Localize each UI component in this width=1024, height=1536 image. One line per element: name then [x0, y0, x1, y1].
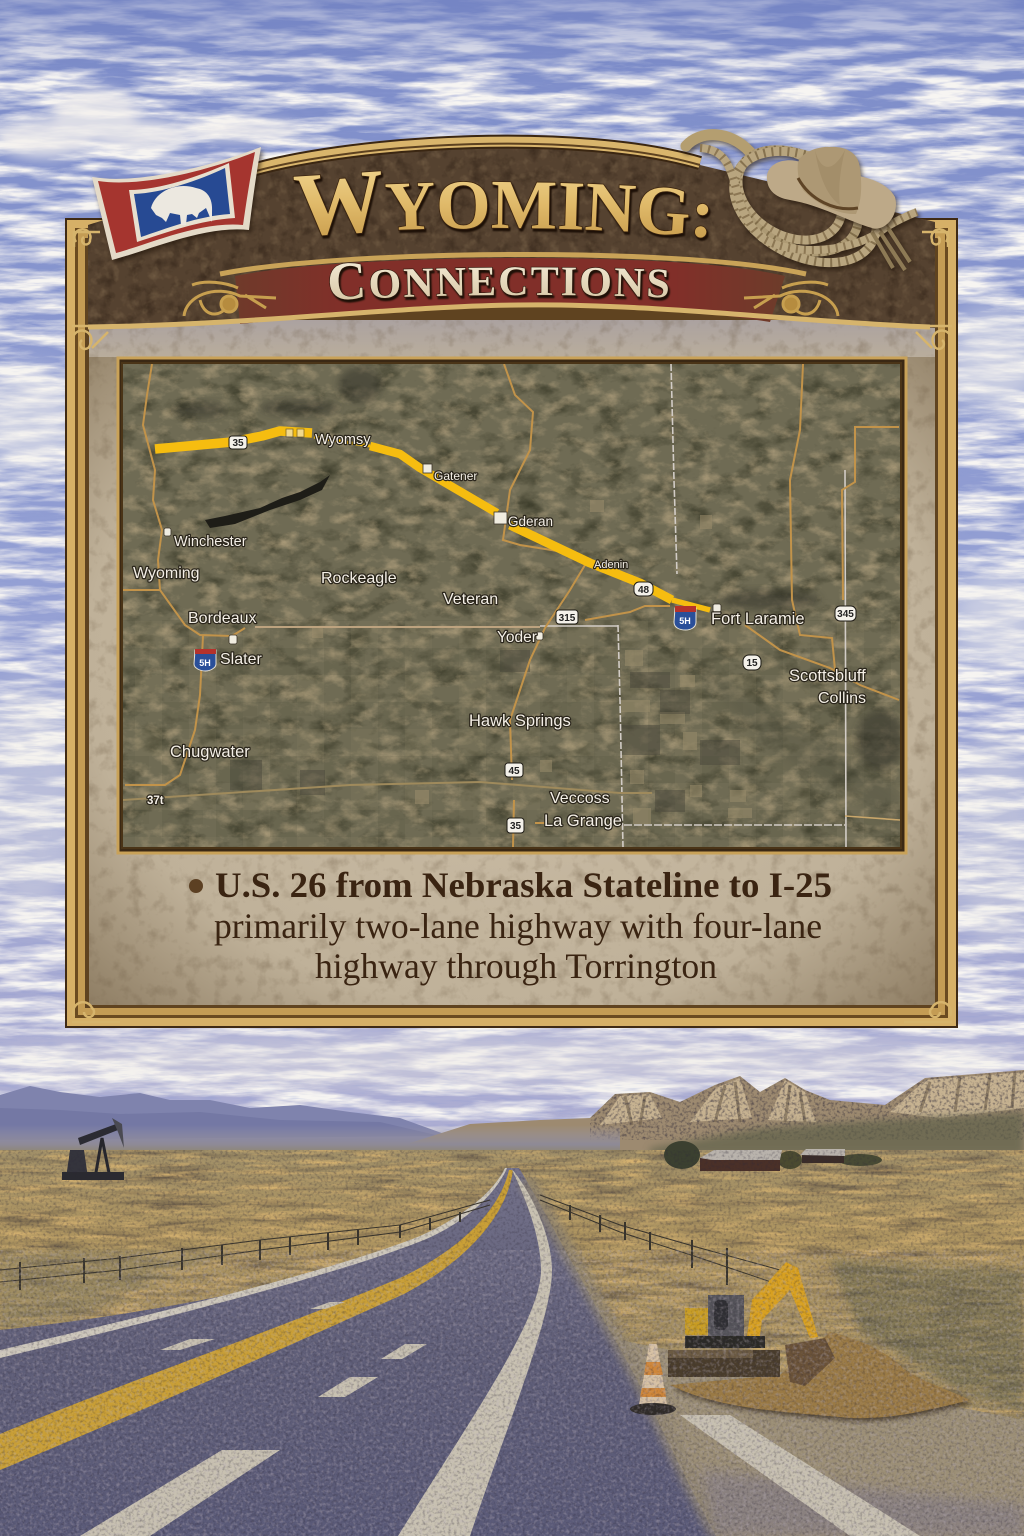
place labels: Fort Laramie: [711, 610, 805, 628]
place labels: Winchester: [174, 534, 247, 550]
place labels: Gatener: [434, 469, 477, 483]
place labels: Hawk Springs: [469, 712, 571, 730]
distant blue mountains: [0, 1086, 450, 1150]
right fence: [540, 1195, 780, 1285]
subtitle: CONNECTIONS: [329, 262, 671, 304]
local roads: [123, 364, 899, 847]
road shoulder: [515, 1170, 1024, 1536]
route shields: 35: [232, 438, 244, 449]
interstate shields: [194, 606, 696, 671]
route shields: [229, 436, 856, 833]
panel frame: [65, 218, 958, 1028]
east-west pale road: [255, 626, 540, 628]
description text: [189, 865, 832, 986]
place labels: Collins: [818, 690, 866, 707]
route shields: 15: [746, 658, 758, 669]
satellite map: [123, 364, 904, 847]
place labels: Wyoming: [133, 565, 200, 582]
parchment body: [89, 320, 935, 1005]
top arch moulding: [252, 142, 700, 170]
lariat rope: [686, 129, 917, 285]
place labels: Veccoss: [550, 790, 610, 807]
place labels: Yoder: [497, 629, 537, 646]
red ribbon: [235, 258, 785, 324]
cowboy hat: [767, 147, 896, 229]
highway heading: U.S. 26 from Nebraska Stateline to I-25: [215, 865, 832, 905]
description line two: highway through Torrington: [315, 946, 717, 986]
interstate shields: 5H: [679, 616, 691, 626]
route shields: 48: [638, 585, 649, 596]
traffic cone: [630, 1344, 676, 1415]
dark ridge: [205, 475, 330, 528]
place labels: Bordeaux: [188, 610, 256, 627]
place labels: Gderan: [508, 514, 553, 529]
route shields: 345: [837, 609, 854, 620]
US 26 highlighted route: [155, 431, 710, 610]
place labels: [133, 432, 866, 830]
prairie grass: [0, 1150, 1024, 1430]
place labels: Rockeagle: [321, 570, 397, 587]
map frame: [117, 357, 907, 854]
Wyoming flag: [92, 147, 261, 260]
asphalt road: [0, 1168, 1024, 1536]
excavator: [668, 1262, 835, 1386]
ribbon top rule: [220, 254, 806, 274]
ranch buildings: [664, 1141, 882, 1171]
place labels: Scottsbluff: [789, 667, 866, 685]
landscape scene: [0, 1070, 1024, 1536]
title: WYOMING:: [292, 170, 711, 242]
ribbon bottom rule: [88, 305, 930, 327]
description line one: primarily two-lane highway with four-lane: [214, 906, 822, 946]
sky background: [0, 0, 1024, 1160]
road grain: [0, 1150, 1024, 1536]
place labels: Wyomsy: [315, 432, 371, 448]
place labels: Veteran: [443, 591, 498, 608]
place labels: La Grange: [544, 812, 622, 830]
interstate shields: 5H: [199, 658, 211, 668]
horizon haze: [0, 1125, 620, 1153]
terrain texture: [123, 364, 900, 847]
place labels: Adenin: [594, 559, 628, 571]
route shields: 315: [559, 613, 576, 624]
town markers: [164, 429, 721, 644]
route shields: 35: [510, 821, 521, 832]
route shields: 45: [508, 766, 520, 777]
dirt pile: [670, 1332, 970, 1418]
flag bison: [151, 186, 212, 225]
farm field patches: [312, 500, 752, 824]
oil pump jack: [62, 1118, 124, 1180]
right white edge line: [398, 1168, 552, 1536]
gold eye ornaments: [184, 282, 838, 316]
edge lines and centre stripe: [0, 1168, 513, 1470]
corner ornaments: [72, 229, 952, 1022]
left fence: [0, 1200, 490, 1290]
dark hills: [174, 367, 904, 770]
bullet: [189, 879, 203, 893]
lane dashes: [80, 1302, 920, 1536]
right rocky buttes: [410, 1070, 1024, 1155]
state and county lines: [540, 364, 900, 847]
header plaque: [88, 130, 938, 330]
place labels: Slater: [220, 651, 262, 668]
place labels: 37t: [147, 795, 164, 807]
place labels: Chugwater: [170, 743, 250, 761]
